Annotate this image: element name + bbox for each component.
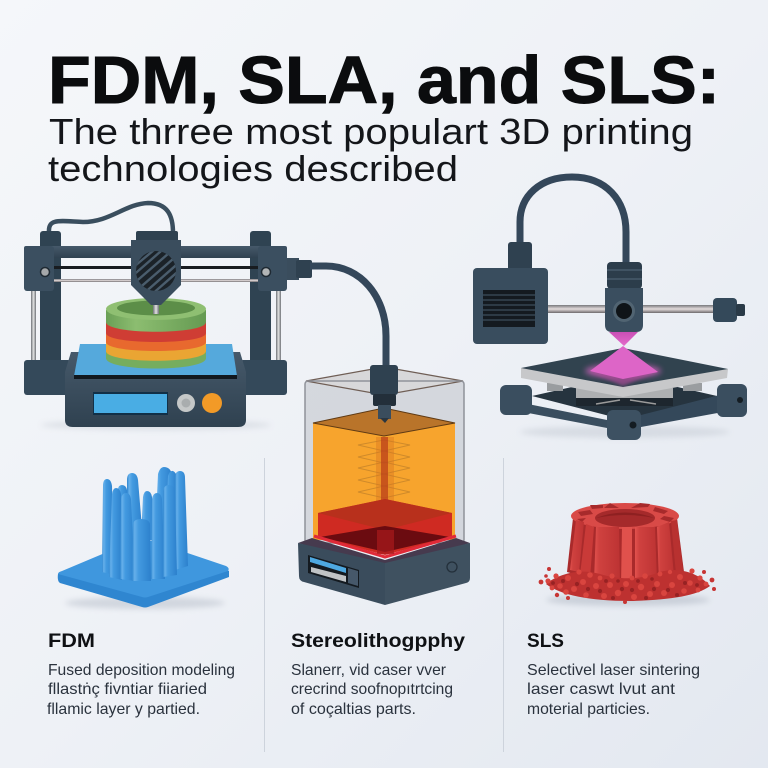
powder plate [521,348,728,397]
SLS heading: SLS [527,631,564,652]
column: FDM description: Fused deposition modeling [48,662,235,679]
column: Stereolithography description [291,631,465,718]
column: FDM description: fllastṅç fivntiar fiiaried [48,681,207,698]
subtitle: The thrree most populart 3D printing [49,111,693,152]
part base [58,540,229,608]
column: Stereolithography description: of coçaltias parts. [291,701,416,718]
subtitle: technologies described [48,148,458,189]
resin cable [287,258,386,368]
filament stack [106,298,206,368]
column dividers [264,458,504,752]
printer base [65,352,246,427]
powder pile [539,567,716,604]
red SLS part [546,503,710,606]
build plate [74,344,237,376]
title: FDM, SLA, and SLS: [48,43,720,118]
FDM printer illustration [24,203,287,430]
extruder head [130,231,182,305]
vent box [473,177,626,344]
column: Stereolithography description: Slanerr, vid caser vver [291,662,447,679]
rod end cap [713,298,745,322]
cured resin layer [314,499,456,557]
column: SLS description: moterial particies. [527,701,650,718]
column: FDM description [47,631,235,718]
column: Stereolithography description: crecrind soofnopıtrtcing [291,681,453,698]
rod [548,305,716,313]
column: SLS description: Selectivel laser sintering [527,662,700,679]
FDM heading: FDM [48,631,95,652]
subtitle [48,111,693,189]
SLA printer illustration [287,258,470,605]
column: FDM description: fllamic layer y partied. [47,701,200,718]
blue FDM part [58,467,229,609]
SLS printer illustration [473,177,747,440]
laser beam [590,332,658,379]
laser nozzle [370,365,398,423]
resin [313,408,455,540]
glass tank [305,367,464,543]
Stereolithography heading: Stereolithogpphy [291,631,465,652]
laser head [605,262,643,332]
column: SLS description [527,631,700,718]
powder bed frame [500,375,747,440]
tank base [298,538,470,605]
column: SLS description: laser caswt lvut ant [527,681,676,698]
